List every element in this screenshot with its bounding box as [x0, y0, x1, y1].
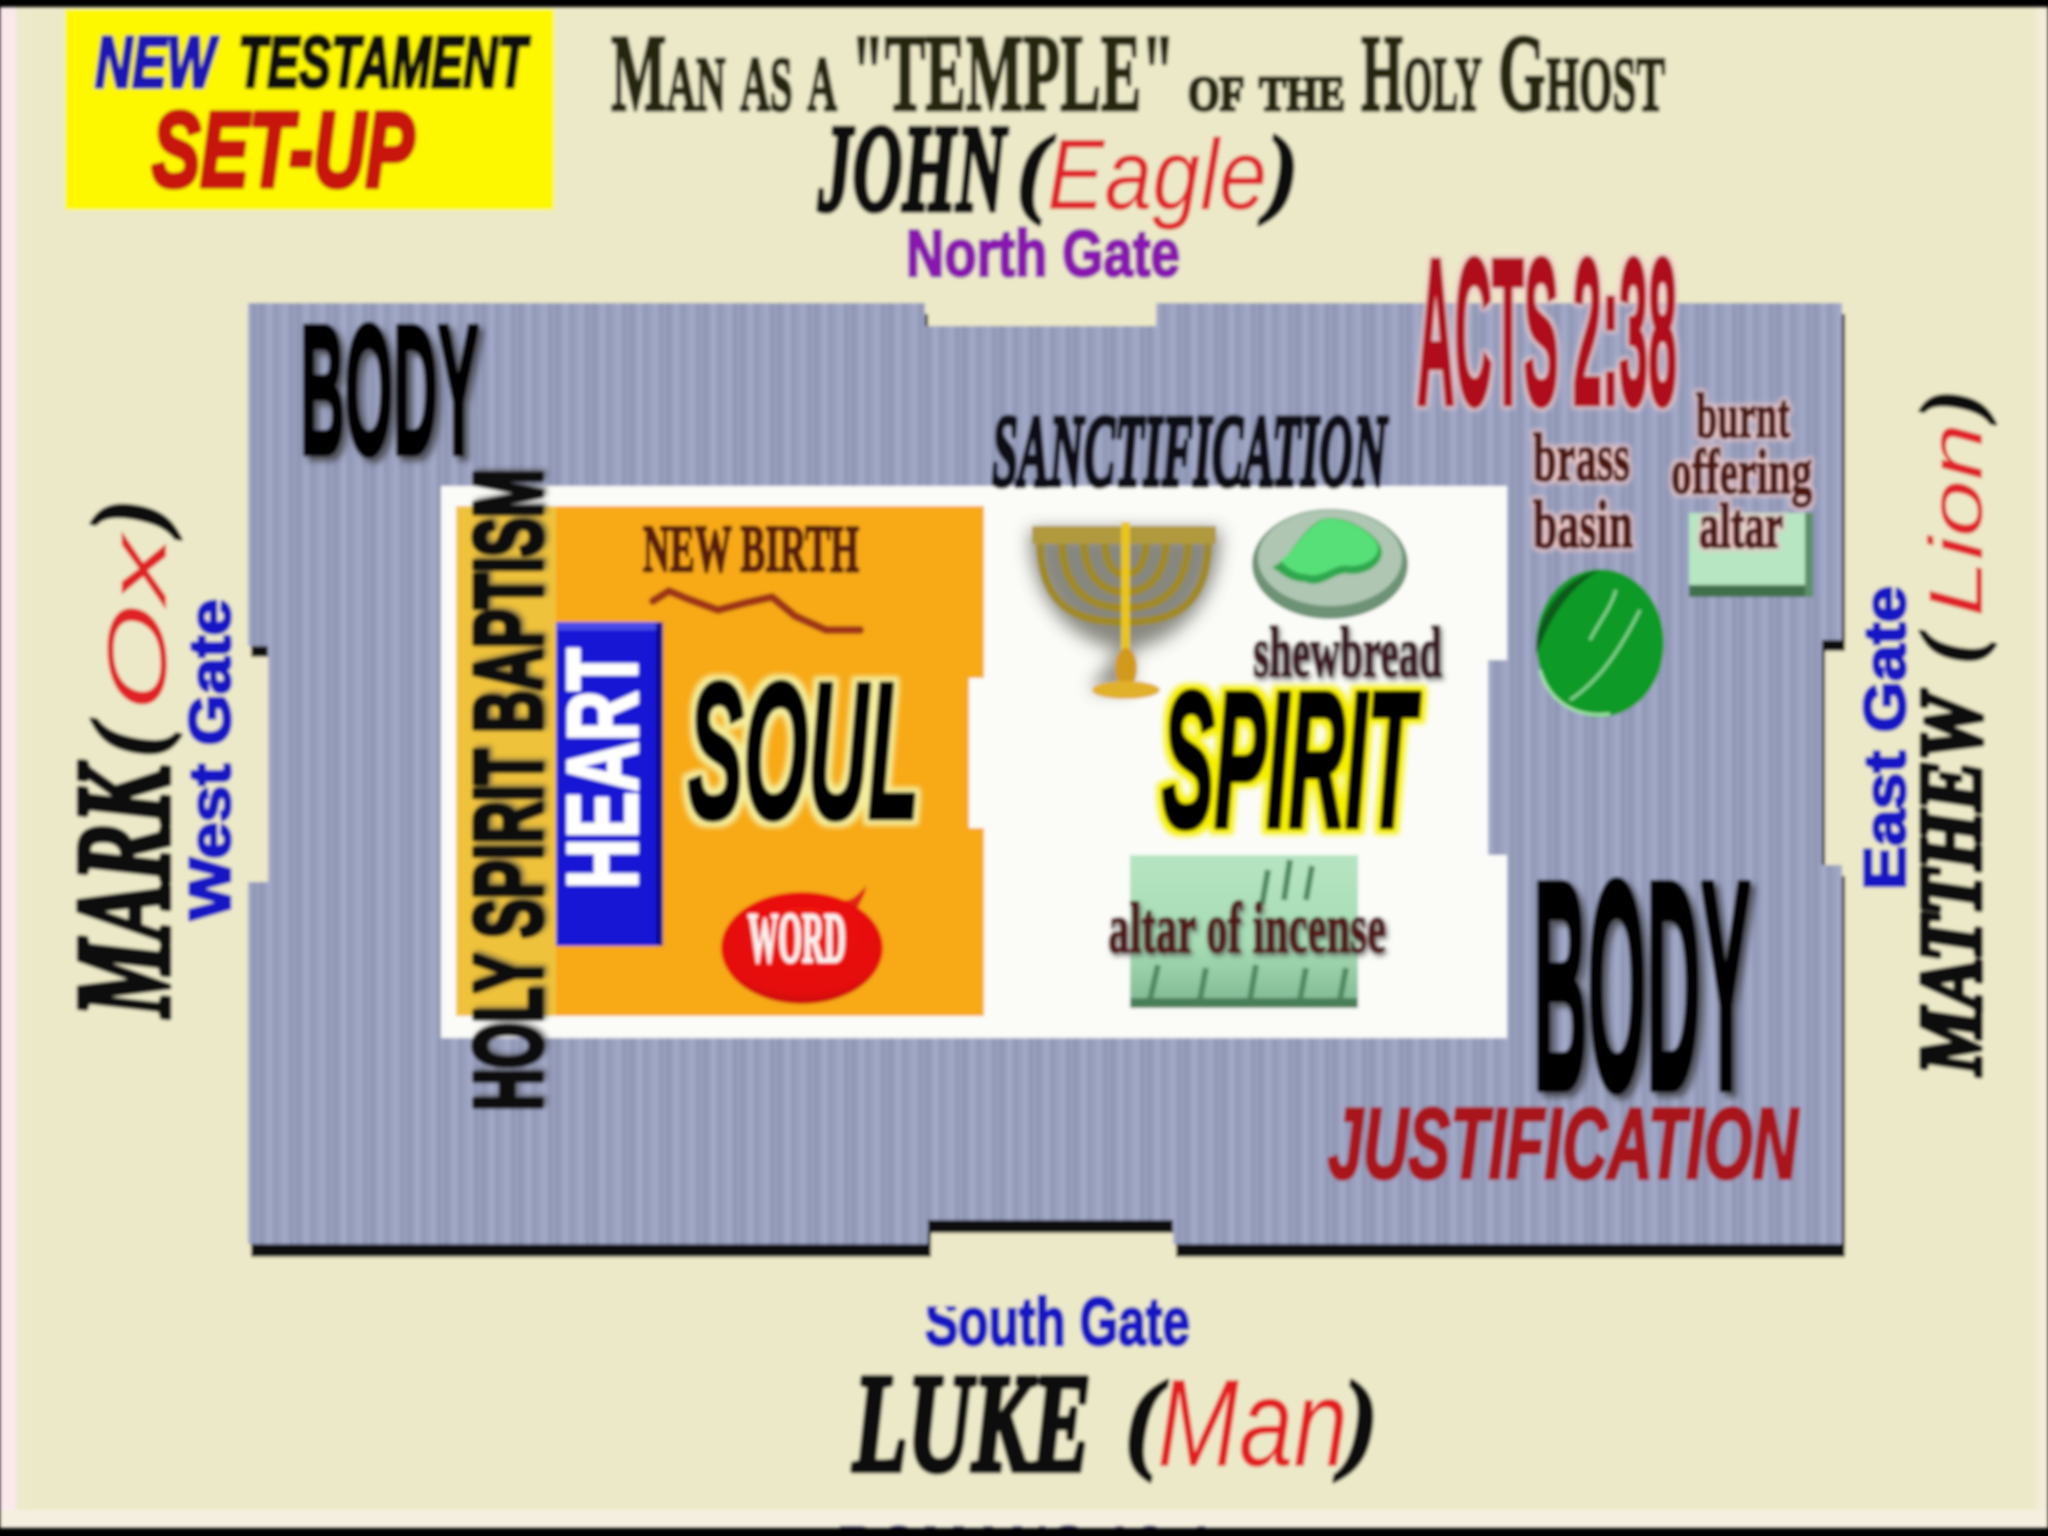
label: brass basin — [1533, 419, 1633, 562]
heading: John (Eagle): JOHN — [817, 100, 1008, 237]
heading: Luke (Man): ) — [1333, 1359, 1379, 1483]
text: SPIRIT — [1162, 652, 1421, 867]
heading: Mark (Ox): ) — [71, 499, 182, 540]
title: Man as a Temple of the Holy Ghost: Man as a — [611, 12, 837, 134]
title: Man as a Temple of the Holy Ghost: Holy — [1361, 12, 1482, 134]
heading: Matthew (Lion): ) — [1904, 390, 1997, 425]
heading: John (Eagle): ( — [1016, 115, 1056, 226]
box: Heart — [547, 622, 663, 946]
label: burnt offering altar: altar — [1699, 490, 1783, 561]
heading: Mark (Ox): MARK — [49, 761, 197, 1018]
label: brass basin: brass — [1533, 419, 1630, 495]
badge: New Testament Set-Up: SET-UP — [152, 91, 414, 209]
text: SOUL — [688, 643, 919, 858]
text: BODY — [300, 287, 479, 492]
heading: Luke (Man): LUKE — [852, 1346, 1091, 1501]
label: burnt offering altar — [1671, 380, 1812, 561]
heading: Matthew (Lion): ( — [1904, 630, 1997, 664]
icon: green brass basin — [1536, 569, 1664, 717]
label: Holy Spirit Baptism: HOLY SPIRIT BAPTISM — [455, 469, 562, 1111]
title: Man as a Temple of the Holy Ghost: of the — [1188, 49, 1345, 126]
heading: Matthew (Lion): Lion — [1914, 423, 1999, 617]
heading: Matthew (Lion) — [1903, 390, 2000, 1077]
title: Man as a Temple of the Holy Ghost — [611, 12, 1665, 134]
icon: altar of incense block — [1130, 855, 1358, 1008]
title: Man as a Temple of the Holy Ghost: "TEMPLE" — [851, 12, 1175, 134]
icon: Word red pot — [721, 886, 883, 1004]
heading: Mark (Ox): ( — [71, 718, 182, 758]
white inner sanctuary — [441, 486, 1507, 1038]
label: brass basin: basin — [1533, 486, 1633, 562]
heading: Luke (Man): ( — [1124, 1359, 1169, 1483]
text: SANCTIFICATION — [992, 395, 1389, 508]
panel: soul, orange room — [556, 506, 984, 1016]
label: New Birth: NEW BIRTH — [643, 512, 859, 586]
icon: shewbread plate — [1252, 509, 1408, 619]
temple outer wall — [248, 303, 1845, 1257]
heading: Luke (Man): Man — [1157, 1355, 1348, 1493]
label: shewbread: shewbread — [1253, 612, 1442, 692]
label: South Gate: South Gate — [925, 1284, 1190, 1360]
label: West Gate: West Gate — [178, 599, 243, 920]
badge: New Testament Set-Up: TESTAMENT — [238, 23, 531, 103]
title: Man as a Temple of the Holy Ghost: Ghost — [1498, 12, 1665, 134]
badge: New Testament Set-Up: NEW — [95, 23, 219, 103]
box: Heart: HEART — [547, 648, 659, 889]
label: burnt offering altar: burnt — [1696, 380, 1790, 451]
heading: John (Eagle): ) — [1258, 115, 1299, 226]
label: East Gate: East Gate — [1853, 586, 1918, 890]
heading: Mark (Ox): Ox — [90, 530, 184, 712]
badge: New Testament Set-Up — [65, 9, 554, 210]
label: burnt offering altar: offering — [1671, 436, 1812, 507]
label: altar of incense: altar of incense — [1108, 888, 1386, 968]
icon: Word red pot: WORD — [748, 898, 846, 978]
icon: menorah — [1030, 522, 1220, 699]
icon: burnt offering altar — [1689, 513, 1813, 597]
heading: John (Eagle): Eagle — [1047, 119, 1267, 231]
label: North Gate: North Gate — [906, 216, 1180, 290]
icon: new birth wavy line — [653, 591, 860, 630]
gold strip behind Holy Spirit Baptism — [456, 506, 556, 1016]
heading: Matthew (Lion): MATTHEW — [1903, 689, 2000, 1077]
